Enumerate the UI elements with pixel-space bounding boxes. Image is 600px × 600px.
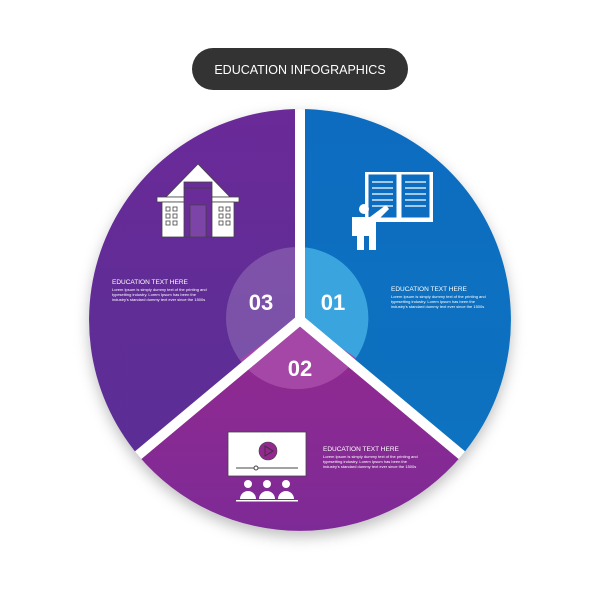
text block 03: typesetting industry. Lorem Ipsum has been the <box>112 292 197 297</box>
text block 02: typesetting industry. Lorem Ipsum has been the <box>323 459 408 464</box>
text block 01: Lorem Ipsum is simply dummy text of the printing and <box>391 294 486 299</box>
number 03: 03 <box>249 290 273 315</box>
dividers <box>130 100 470 462</box>
number 02: 02 <box>288 356 312 381</box>
icon: school building <box>157 164 239 237</box>
text block 01 <box>391 286 486 309</box>
text block 03: Lorem Ipsum is simply dummy text of the printing and <box>112 287 207 292</box>
text block 02: industry's standard dummy text ever since the 1500s <box>323 464 416 469</box>
pie chart <box>89 109 511 531</box>
panel: segment 01 <box>300 109 511 456</box>
text block 02 <box>323 446 418 469</box>
panel: segment 02 <box>138 320 462 531</box>
title: EDUCATION INFOGRAPHICS <box>214 63 386 77</box>
icon: video lesson <box>228 432 306 502</box>
text block 01: typesetting industry. Lorem Ipsum has been the <box>391 299 476 304</box>
icon: teacher with book <box>352 172 433 250</box>
center circle <box>226 247 368 389</box>
text block 02: Lorem Ipsum is simply dummy text of the printing and <box>323 454 418 459</box>
text block 03 <box>112 279 207 302</box>
text block 02: EDUCATION TEXT HERE <box>323 446 400 453</box>
text block 01: EDUCATION TEXT HERE <box>391 286 468 293</box>
title <box>192 48 408 90</box>
text block 01: industry's standard dummy text ever since the 1500s <box>391 304 484 309</box>
number 01: 01 <box>321 290 345 315</box>
text block 03: industry's standard dummy text ever since the 1500s <box>112 297 205 302</box>
panel: segment 03 <box>89 109 300 456</box>
text block 03: EDUCATION TEXT HERE <box>112 279 189 286</box>
